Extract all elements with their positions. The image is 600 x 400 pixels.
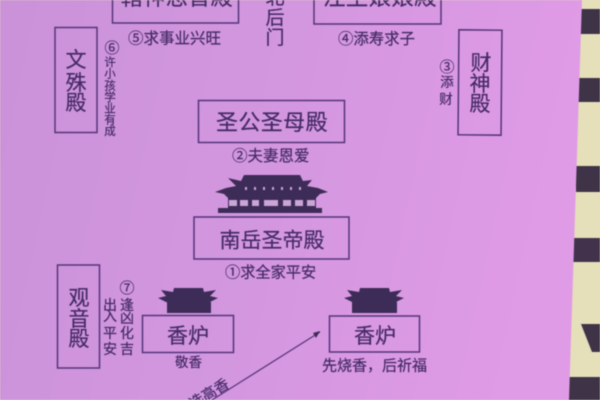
hall: top right [314, 0, 441, 24]
hall: Guanyin: 音 [68, 308, 90, 331]
caption: 7: 凶 [120, 310, 134, 326]
caption: 7: 出 [103, 297, 117, 313]
hall: top left [112, 0, 238, 23]
hall: Nanyue Shengdi: 南岳圣帝殿 [220, 230, 324, 252]
caption: 6: 许 [104, 56, 116, 69]
caption: 1: ①求全家平安 [225, 264, 316, 282]
caption: burn incense first: 先烧香，后祈福 [322, 358, 427, 374]
north back gate label: 后 [265, 7, 285, 29]
caption: 7: 吉 [120, 341, 134, 357]
caption: 3: 财 [439, 92, 453, 107]
caption: 6: ⑥ [104, 40, 120, 57]
incense burner box right [330, 316, 420, 352]
hall: Shenggong Shengmu: 圣公圣母殿 [216, 110, 328, 135]
caption: 7: ⑦ [119, 280, 135, 297]
caption: 6: 有 [104, 112, 116, 126]
hall: Nanyue Shengdi [194, 217, 349, 259]
hall: Wealth God: 殿 [470, 93, 490, 116]
incense burner box left: 香炉 [167, 325, 209, 348]
hall: Wealth God: 神 [470, 73, 490, 96]
caption: 5: ⑤求事业兴旺 [128, 30, 221, 48]
background strip: striped cream surface [560, 0, 600, 400]
caption: 2: ②夫妻恩爱 [232, 147, 310, 165]
hall: Wenshu: 文 [66, 49, 86, 72]
caption: 7: 安 [103, 341, 117, 357]
caption: 3: 添 [440, 75, 454, 90]
icon: right incense burner [344, 288, 404, 313]
caption: 6: 业 [104, 102, 116, 116]
icon: main temple [215, 175, 328, 213]
caption: 7: 平 [103, 325, 117, 341]
hall: Guanyin [58, 265, 100, 368]
hall: Wenshu: 殊 [66, 72, 86, 95]
incense burner box right: 香炉 [354, 325, 396, 348]
caption: 6: 成 [104, 125, 116, 138]
hall: Guanyin: 观 [68, 287, 90, 310]
arrow: path to burner [212, 331, 320, 400]
caption: 7: 逢 [120, 297, 134, 313]
caption: 7: 入 [103, 308, 117, 324]
caption: 7: 化 [120, 325, 134, 341]
caption: 6: 小 [104, 68, 116, 80]
caption: 7 [103, 280, 135, 357]
hall: Wenshu [55, 28, 97, 132]
caption: offer incense: 敬香 [175, 355, 202, 370]
north back gate label: 门 [265, 27, 285, 49]
caption: 3: ③ [439, 59, 455, 76]
hall: Guanyin: 殿 [68, 328, 90, 351]
hall: Wealth God: 财 [470, 52, 492, 75]
hall: Shenggong Shengmu [198, 100, 344, 142]
hall: Wenshu: 殿 [66, 92, 86, 115]
caption: 6: 孩 [104, 80, 116, 92]
incense burner box left [142, 316, 234, 352]
caption: 4: ④添寿求子 [338, 30, 415, 48]
hall: Wealth God [458, 30, 502, 135]
north back gate label [265, 0, 285, 49]
caption: 6 [104, 40, 120, 138]
caption: 6: 学 [104, 90, 116, 104]
icon: left incense burner [158, 288, 218, 313]
caption: 3 [439, 59, 455, 107]
